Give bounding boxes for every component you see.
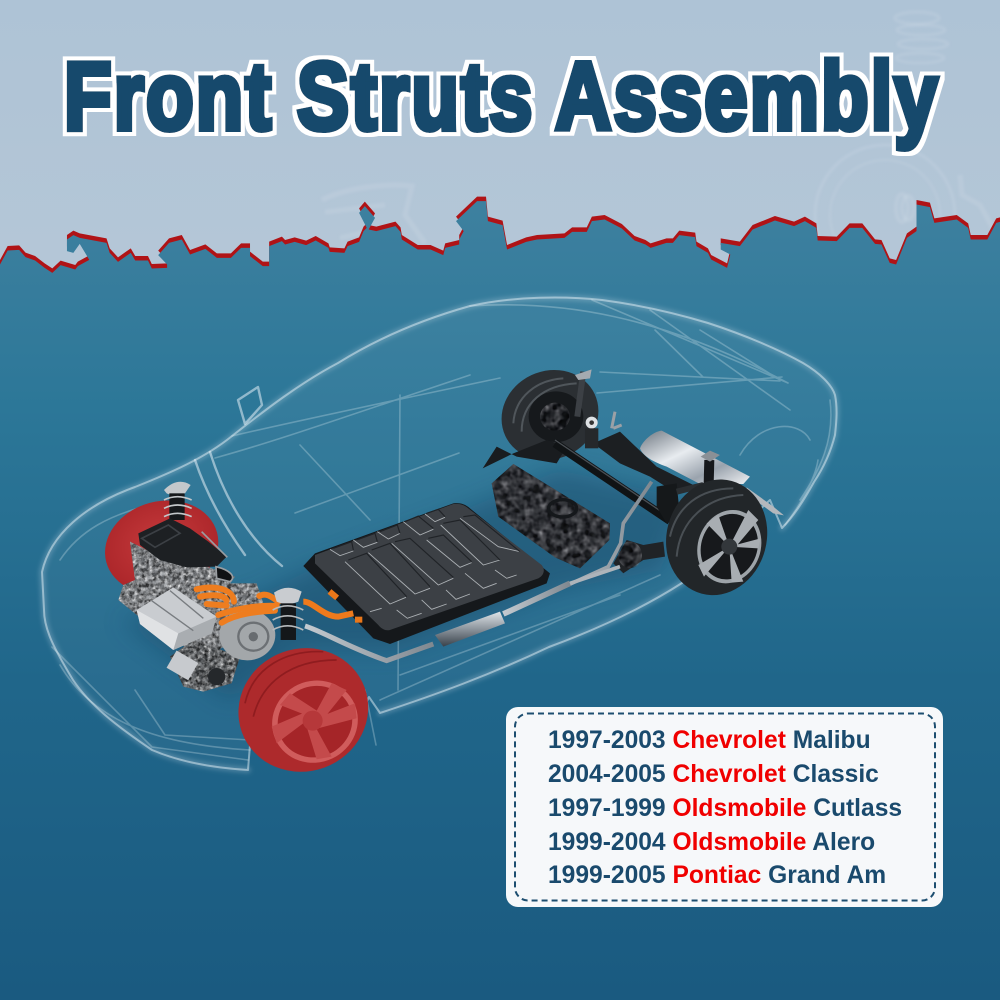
left bracket (483, 440, 567, 468)
orange battery connector (303, 589, 362, 623)
bracket cluster (657, 483, 680, 523)
windshield base and mirror (195, 387, 282, 566)
battery ribs (330, 514, 520, 618)
gearbox (170, 640, 240, 692)
fender strip (747, 487, 784, 515)
battery pack (303, 503, 550, 644)
cross link (537, 482, 652, 599)
faint ghost strut watermark (322, 12, 994, 285)
silver inverter box (137, 587, 217, 650)
near red wheel (221, 630, 386, 790)
rear suspension assembly (483, 354, 784, 607)
near strut (273, 588, 303, 640)
far strut (164, 482, 192, 520)
engine body (118, 542, 263, 657)
rear strut far (577, 372, 583, 417)
near rear wheel (653, 468, 780, 607)
differential (613, 540, 665, 573)
rear suspension arm (593, 432, 693, 493)
vehicle list: 1999-2004 Oldsmobile Alero (548, 829, 875, 856)
vehicle list (548, 727, 902, 889)
silver muffler (640, 431, 750, 484)
title: Front Struts Assembly (64, 42, 940, 150)
lower blue background (0, 201, 1000, 668)
front axle and engine assembly (94, 482, 386, 790)
body outline (42, 298, 837, 770)
vehicle list: 2004-2005 Chevrolet Classic (548, 761, 879, 788)
exhaust pipe and muffler (305, 567, 620, 661)
motor housing (219, 610, 275, 660)
torn red edge (0, 197, 1000, 313)
rear axle beam (555, 443, 670, 521)
rear strut near (694, 460, 724, 485)
orange cables (197, 588, 278, 623)
vehicle list: 1997-2003 Chevrolet Malibu (548, 727, 871, 754)
chassis ground shadow (120, 470, 690, 700)
transparent car body (42, 298, 837, 770)
vehicle list: 1997-1999 Oldsmobile Cutlass (548, 795, 902, 822)
upper pale background (0, 0, 1000, 300)
soft body glow (42, 298, 837, 770)
far red tire (94, 488, 229, 607)
fuel tank (492, 464, 610, 568)
dark engine cover (138, 518, 227, 567)
far rear wheel (487, 354, 613, 476)
body detail lines (52, 300, 831, 760)
compatibility card (506, 707, 943, 907)
dashed border (515, 714, 935, 900)
vehicle list: 1999-2005 Pontiac Grand Am (548, 862, 886, 889)
